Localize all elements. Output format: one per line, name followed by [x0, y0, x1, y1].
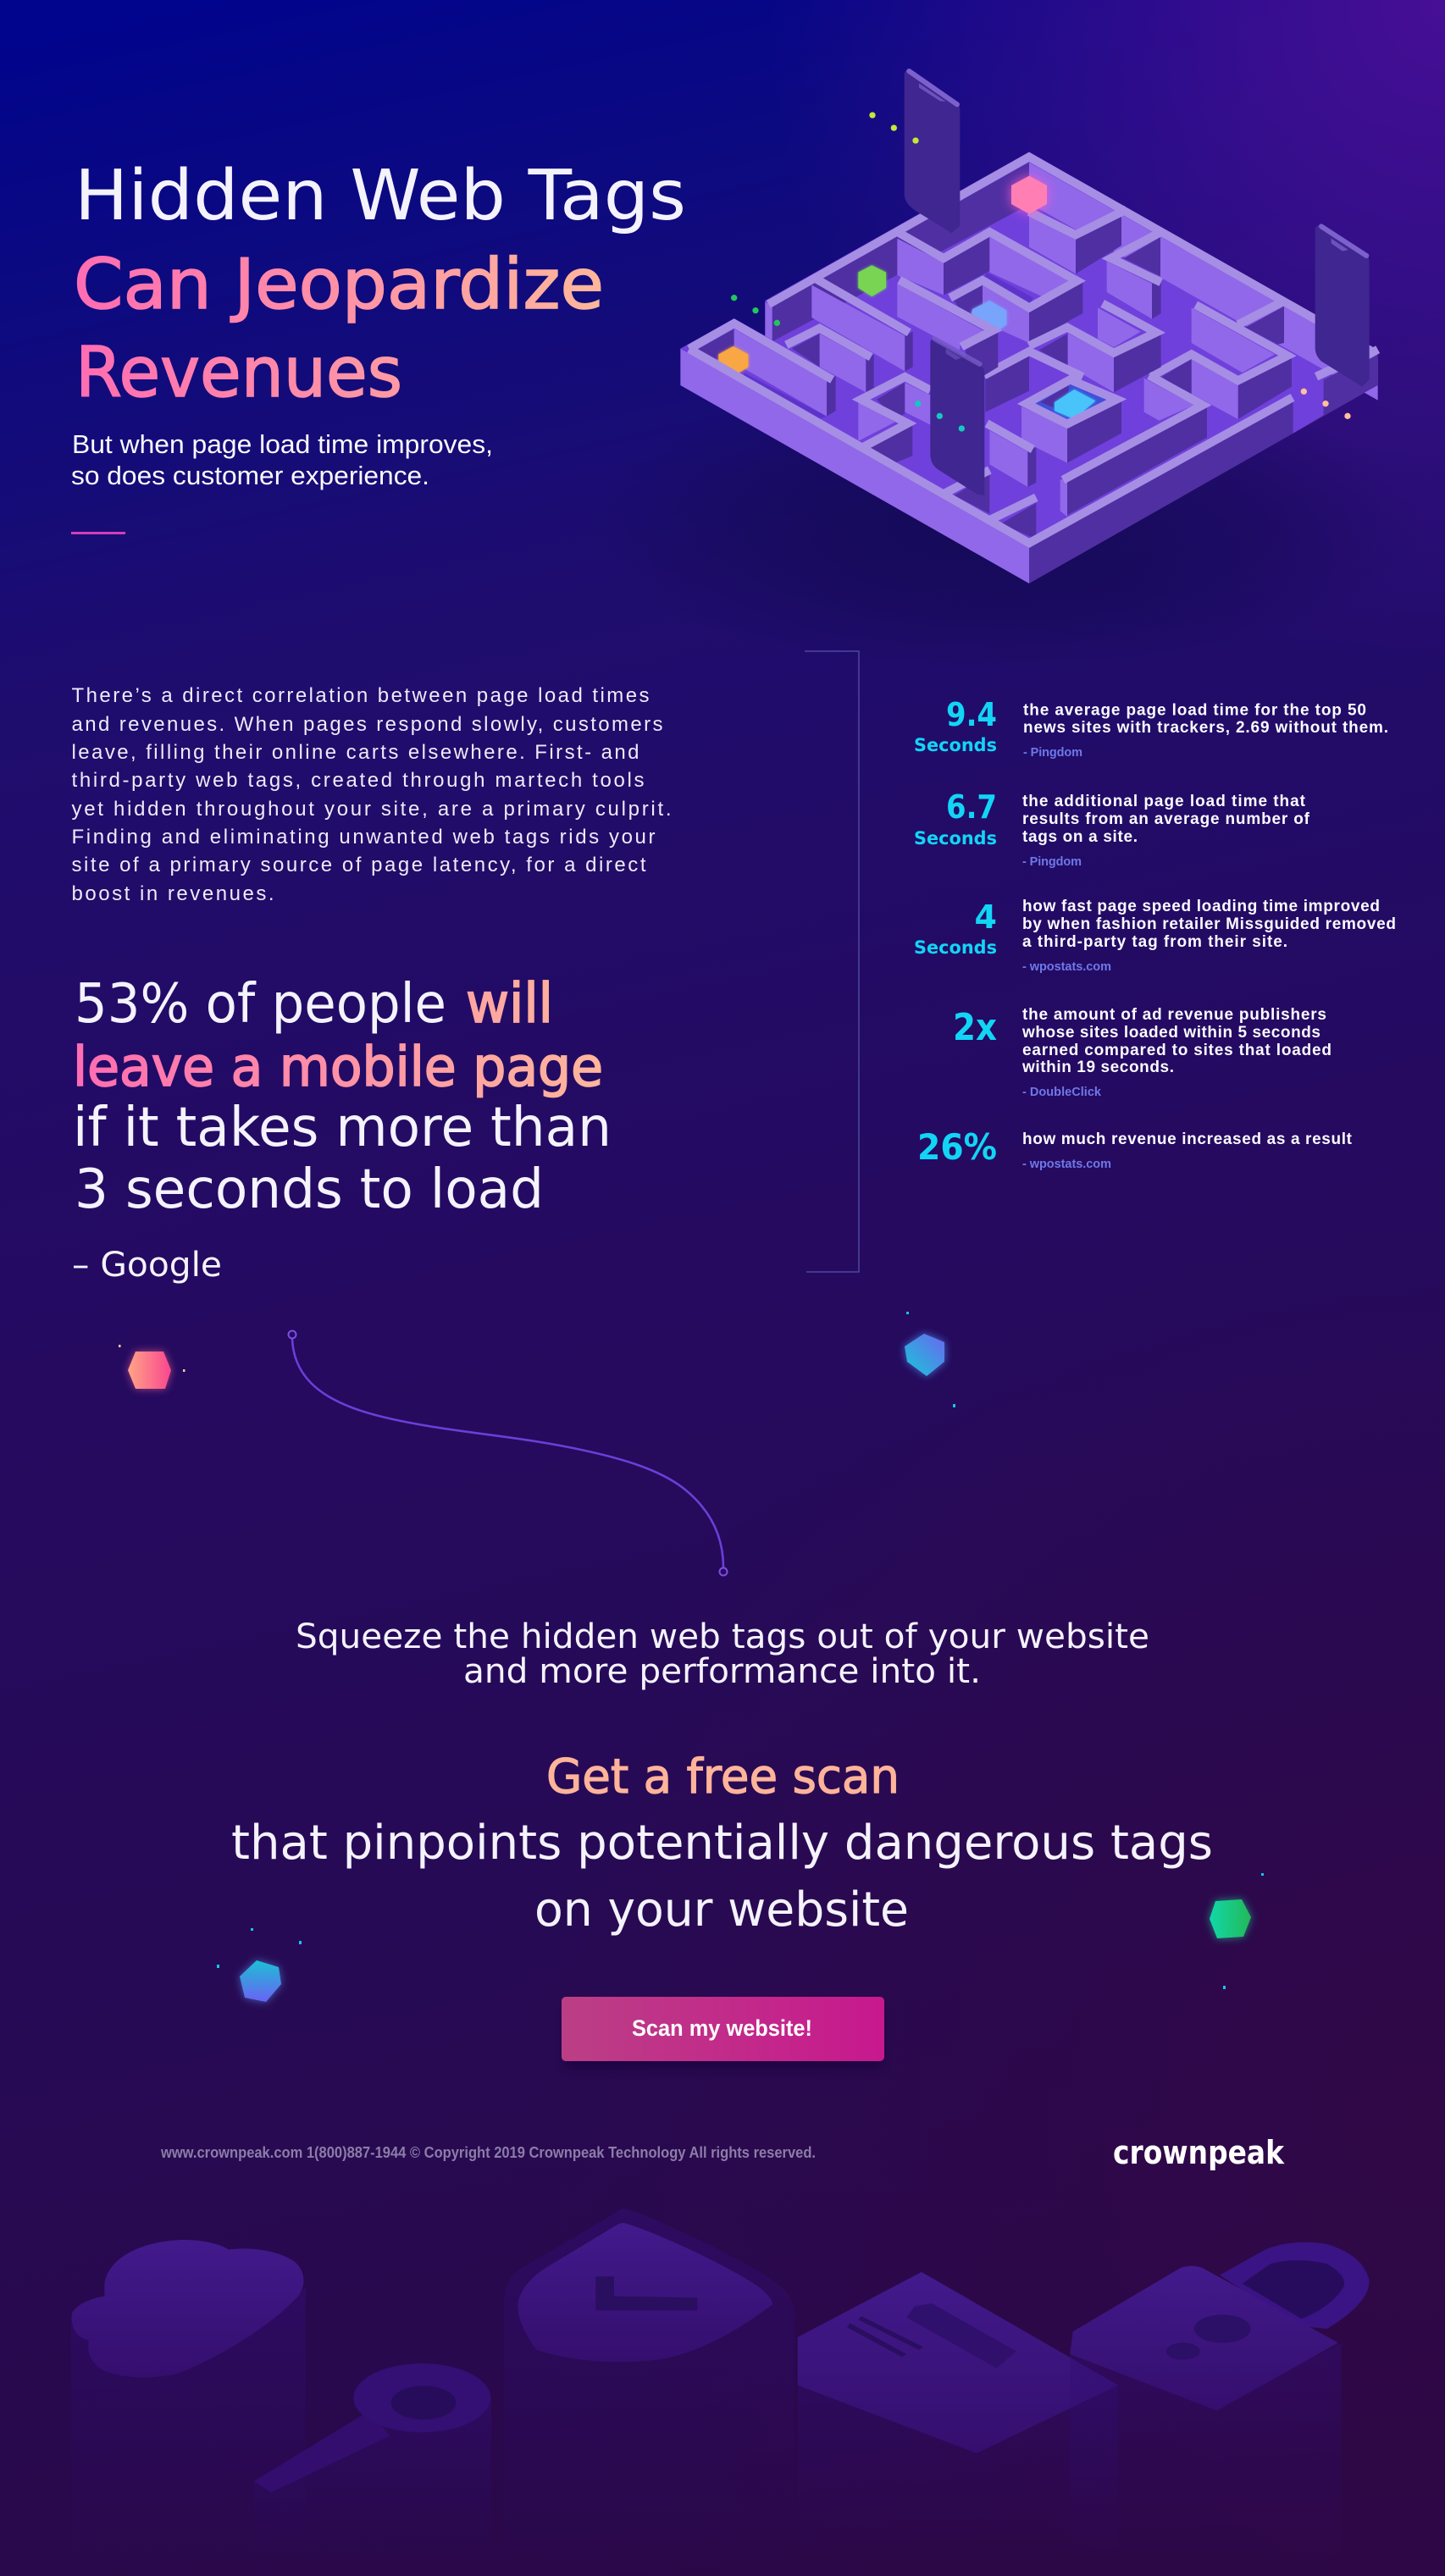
call to action: free scan: Get a free scan	[546, 1750, 900, 1805]
gem: blue lower hexagon	[217, 1928, 302, 2002]
stat: 2x: within 19 seconds.	[1021, 1059, 1174, 1076]
bottom icon strip	[71, 2208, 1370, 2523]
quote: 53% of people: if it takes more than	[73, 1097, 612, 1159]
button: scan my website: Scan my website!	[632, 2015, 812, 2041]
subtitle: so does customer experience.	[71, 461, 429, 490]
stat: 2x: whose sites loaded within 5 seconds	[1021, 1024, 1320, 1042]
gem: blue hexagon	[905, 1312, 955, 1407]
call to action: free scan	[231, 1750, 1213, 1938]
stat: 26%: 26%	[917, 1126, 997, 1168]
stat: 2x	[953, 1006, 1332, 1099]
maze back walls	[765, 157, 1378, 401]
maze front rim	[689, 349, 1378, 543]
stat: 26%	[917, 1126, 1353, 1171]
intro paragraph: and revenues. When pages respond slowly, customers	[71, 713, 662, 736]
icon: cloud	[71, 2240, 306, 2566]
intro paragraph: Finding and eliminating unwanted web tags rids your	[71, 826, 655, 849]
phone: right	[1315, 224, 1370, 387]
stat: 6.7 seconds: Seconds	[914, 828, 997, 849]
stat: 6.7 seconds: the additional page load time that	[1022, 793, 1306, 810]
call to action: free scan: that pinpoints potentially dangerous tags	[231, 1816, 1213, 1871]
stat: 9.4 seconds: - Pingdom	[1023, 746, 1082, 760]
quote: 53% of people	[73, 973, 612, 1221]
stat: 4 seconds: - wpostats.com	[1022, 960, 1111, 974]
quote: 53% of people: leave a mobile page	[73, 1036, 603, 1099]
stat: 2x: earned compared to sites that loaded	[1022, 1042, 1332, 1059]
stat: 2x: - DoubleClick	[1022, 1086, 1102, 1099]
call to action: free scan: on your website	[534, 1882, 909, 1938]
stat: 26%: how much revenue increased as a result	[1022, 1130, 1353, 1148]
gem: blue in maze	[972, 301, 1006, 332]
illustration: isometric maze with phones	[680, 69, 1380, 630]
title	[74, 156, 686, 413]
gem: orange	[718, 346, 748, 374]
icon: key	[254, 2363, 491, 2566]
accent rule	[71, 532, 125, 534]
particle dots	[731, 112, 1351, 432]
intro paragraph	[71, 684, 671, 905]
footer copyright: www.crownpeak.com 1(800)887-1944 © Copyright 2019 Crownpeak Technology All rights reserved.	[160, 2144, 816, 2161]
stat: 4 seconds: Seconds	[914, 937, 997, 958]
gem: green hexagon	[1210, 1873, 1264, 1989]
maze base	[680, 152, 1378, 583]
button: scan my website	[562, 1997, 884, 2070]
stat: 4 seconds: 4	[975, 898, 997, 936]
title: Can Jeopardize	[74, 245, 604, 325]
gem: cyan	[1055, 390, 1095, 419]
intro paragraph: boost in revenues.	[71, 882, 274, 905]
intro paragraph: leave, filling their online carts elsewhere. First- and	[71, 741, 639, 764]
gem: pink	[1011, 176, 1047, 214]
stat: 6.7 seconds: 6.7	[946, 788, 997, 826]
intro paragraph: yet hidden throughout your site, are a primary culprit.	[71, 798, 671, 821]
stat: 4 seconds: by when fashion retailer Missguided removed	[1022, 915, 1396, 933]
maze interior walls	[689, 209, 1292, 539]
icon: shield clock	[504, 2208, 794, 2576]
phone: top	[905, 69, 960, 233]
stat: 9.4 seconds: news sites with trackers, 2.69 without them.	[1023, 719, 1388, 737]
stat: 2x: 2x	[953, 1006, 997, 1049]
gem: green	[858, 265, 886, 296]
logo: crownpeak: crownpeak	[1113, 2134, 1285, 2171]
quote: 53% of people: will	[466, 973, 553, 1036]
stat: 9.4 seconds: the average page load time for the top 50	[1023, 701, 1366, 720]
stat: 26%: - wpostats.com	[1022, 1158, 1111, 1171]
connector arrow curve	[288, 1331, 727, 1575]
stat: 6.7 seconds	[914, 788, 1310, 869]
intro paragraph: third-party web tags, created through martech tools	[71, 769, 644, 792]
stat: 2x: the amount of ad revenue publishers	[1022, 1006, 1326, 1024]
stat: 9.4 seconds: Seconds	[914, 735, 997, 755]
call to action: squeeze	[296, 1617, 1149, 1691]
phone: center	[930, 339, 984, 495]
quote source: – Google	[72, 1246, 222, 1285]
call to action: squeeze: Squeeze the hidden web tags out of your website	[296, 1617, 1149, 1656]
subtitle	[71, 429, 493, 490]
intro paragraph: There’s a direct correlation between page load times	[71, 684, 649, 707]
icon: credit card	[798, 2272, 1118, 2566]
stat: 6.7 seconds: - Pingdom	[1022, 855, 1082, 869]
quote: 53% of people: 3 seconds to load	[75, 1158, 544, 1221]
call to action: squeeze: and more performance into it.	[463, 1652, 981, 1691]
stats bracket	[805, 651, 859, 1272]
stat: 4 seconds	[914, 898, 1396, 974]
quote: 53% of people: 53% of people	[75, 973, 446, 1036]
title: Revenues	[75, 333, 402, 413]
stat: 6.7 seconds: tags on a site.	[1022, 828, 1138, 846]
stat: 9.4 seconds	[914, 696, 1388, 760]
subtitle: But when page load time improves,	[72, 429, 493, 459]
stat: 4 seconds: how fast page speed loading time improved	[1022, 898, 1380, 915]
stat: 9.4 seconds: 9.4	[946, 696, 997, 733]
icon: padlock	[1070, 2242, 1370, 2566]
stat: 4 seconds: a third-party tag from their site.	[1022, 933, 1287, 951]
stat: 6.7 seconds: results from an average number of	[1022, 810, 1310, 828]
gem: pink hexagon	[119, 1345, 185, 1389]
title: Hidden Web Tags	[75, 156, 686, 236]
intro paragraph: site of a primary source of page latency, for a direct	[71, 854, 646, 876]
